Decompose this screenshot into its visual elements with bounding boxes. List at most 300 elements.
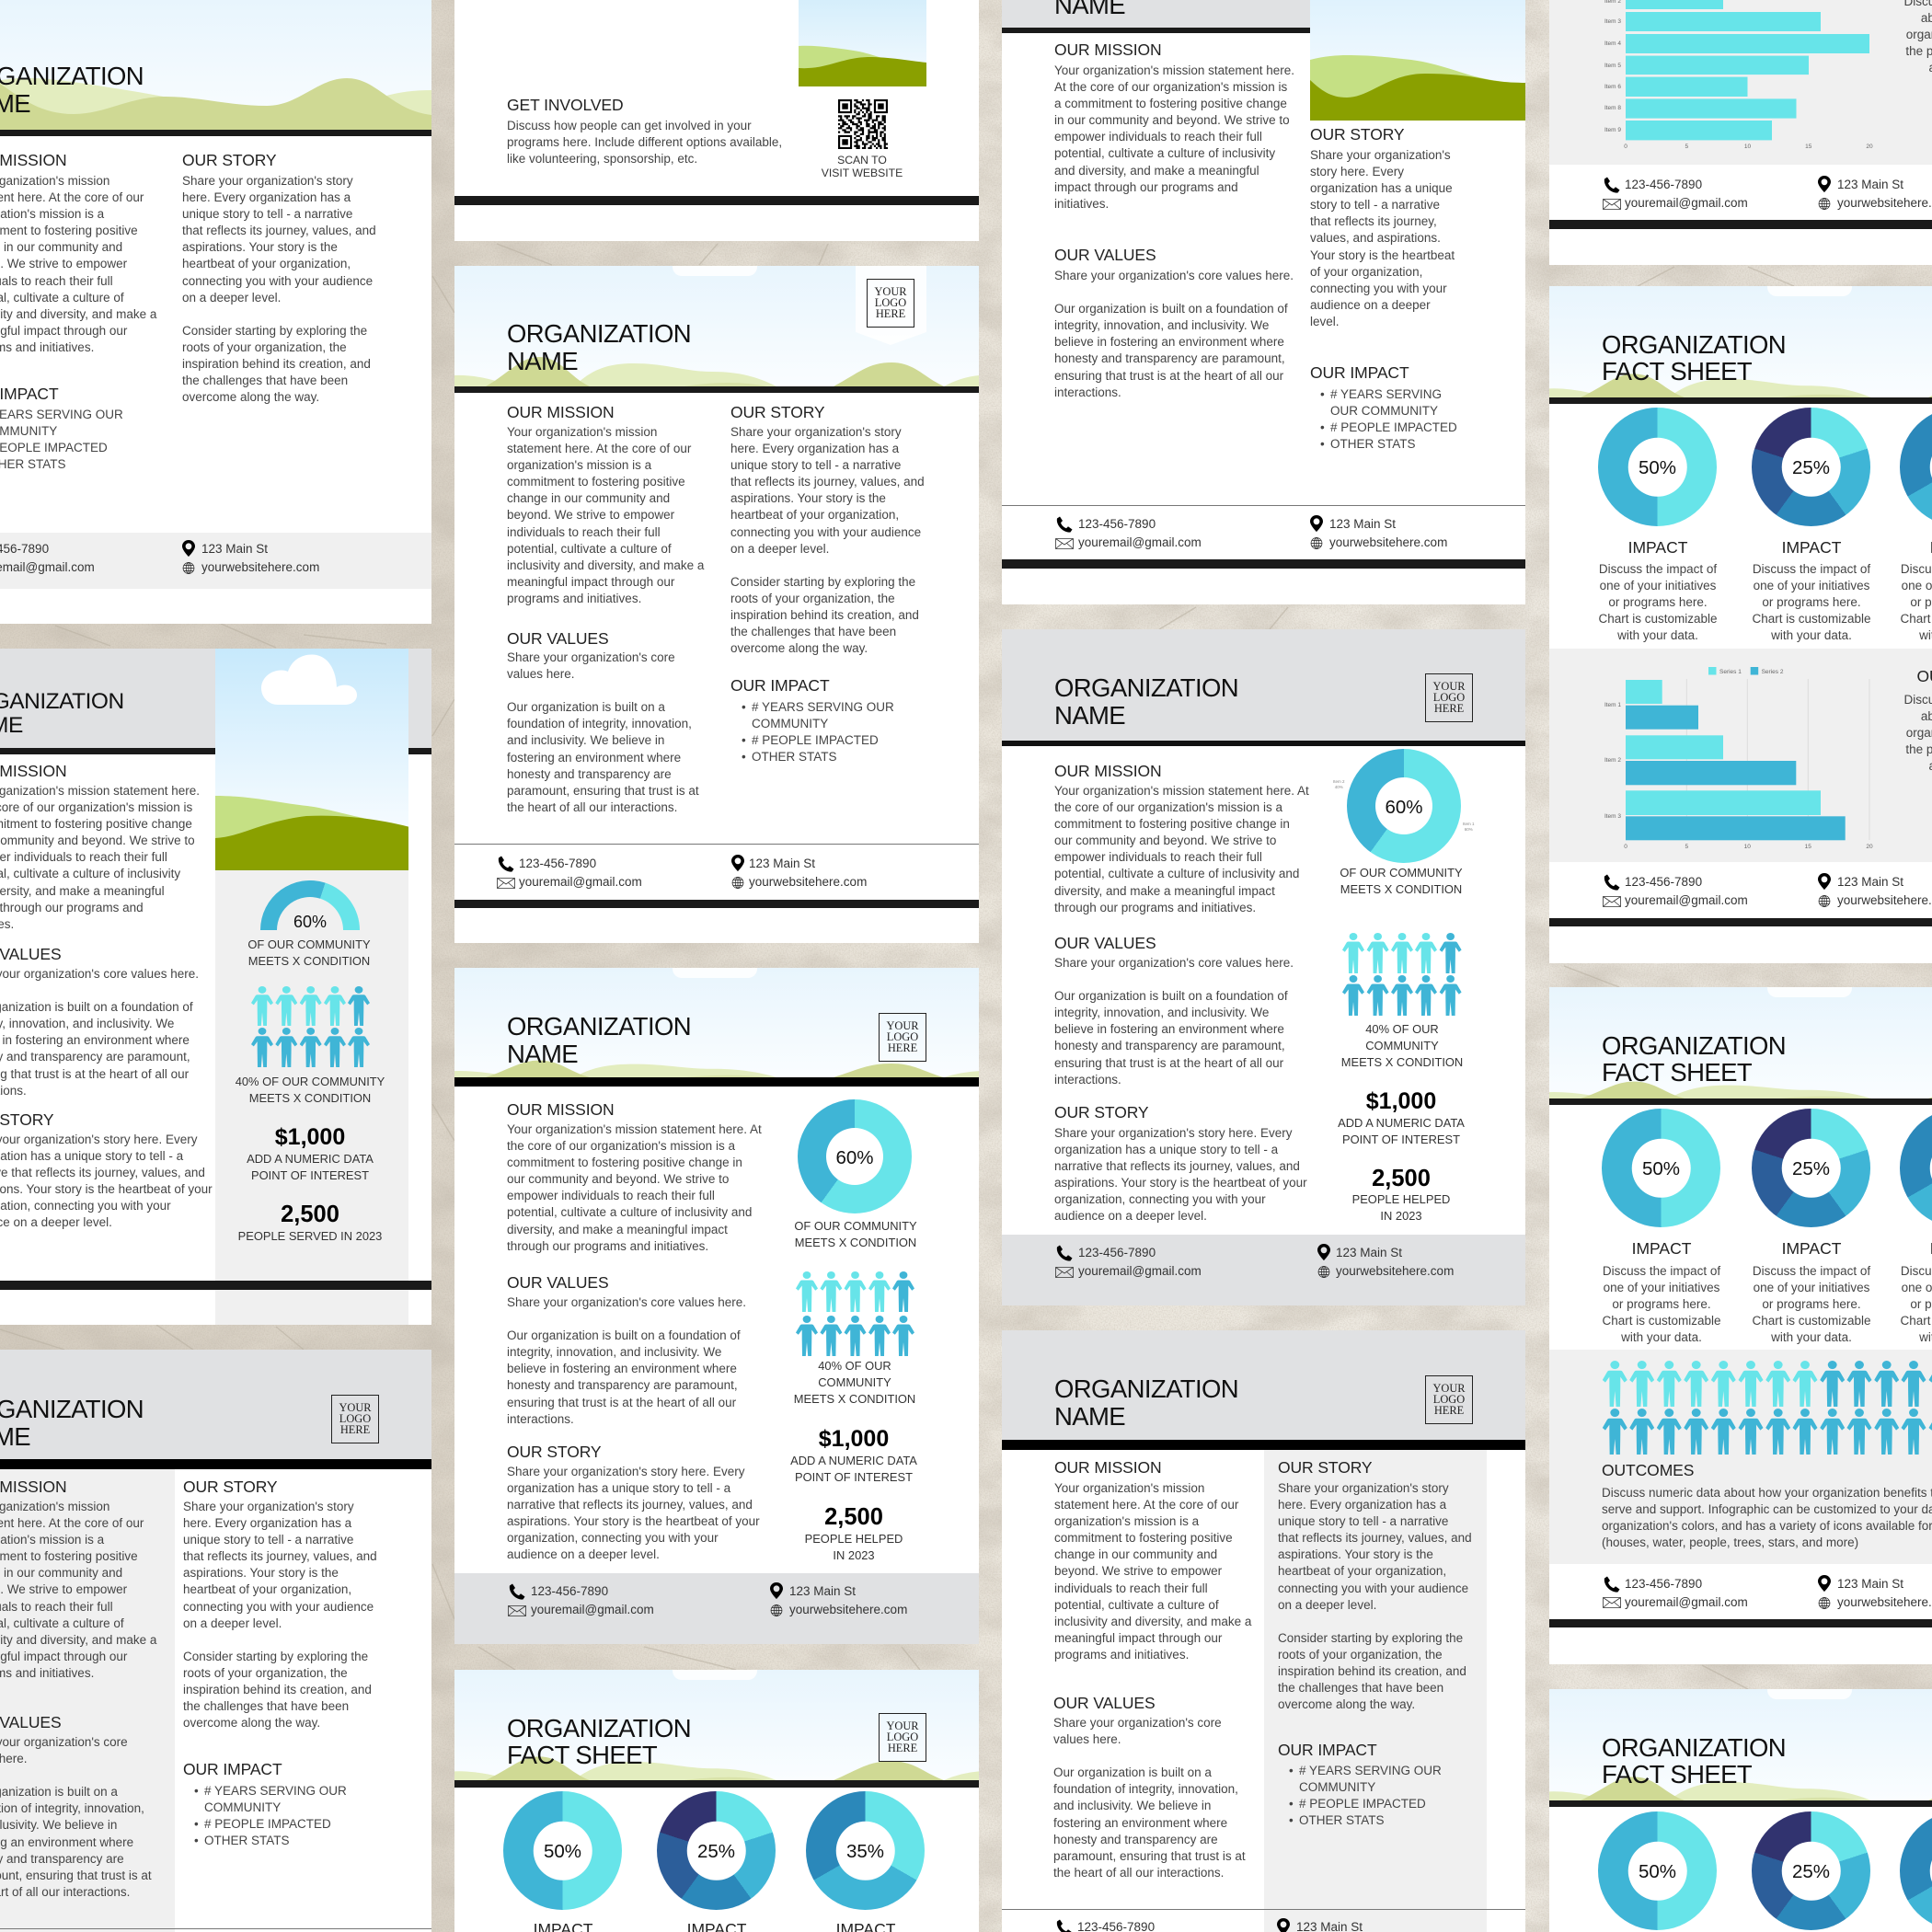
header rule: [1549, 1800, 1932, 1807]
mission text: potential, cultivate a culture of inclusivity and: [507, 1205, 752, 1219]
bar chart: [1549, 0, 1890, 161]
footer divider: [454, 844, 979, 845]
values text: the heart of all our interactions.: [507, 800, 677, 814]
values text: [1054, 268, 1294, 401]
story text: roots of your organization, the: [182, 340, 347, 354]
heading: our mission: OUR MISSION: [1054, 1458, 1162, 1477]
story text: [507, 1465, 760, 1561]
outcomes text: (houses, water, people, trees, stars, and more): [1602, 1535, 1858, 1549]
heading: our mission: OUR MISSION: [1054, 40, 1162, 59]
impact text: or programs here.: [1762, 595, 1861, 609]
values text: [0, 967, 199, 1098]
mission text: [507, 425, 705, 605]
donut chart: 60%: [798, 1099, 912, 1213]
mission text: diversity, and make a meaningful impact: [1054, 884, 1275, 898]
impact text: [1886, 1263, 1932, 1346]
pictogram caption: MEETS X CONDITION: [794, 1392, 915, 1406]
title: [0, 1396, 144, 1451]
mission text: commitment to fostering positive: [1054, 1531, 1233, 1545]
header rule: [1549, 1098, 1932, 1105]
mission text: the core of our organization's mission is a: [507, 1139, 735, 1153]
outcomes text: [1602, 1485, 1932, 1551]
footer rule: [1549, 220, 1932, 229]
panel: two column with grey left column: •: [194, 1784, 199, 1798]
values text: believe in fostering an environment where: [507, 1362, 737, 1375]
story text: here. Every organization has a: [730, 442, 899, 455]
donut chart: 35%: [1900, 408, 1932, 526]
story text: Consider starting by exploring the: [730, 575, 915, 589]
contact details: youremail@gmail.com: [1078, 1264, 1202, 1278]
title: [507, 319, 691, 375]
pictogram caption: COMMUNITY: [1365, 1039, 1439, 1052]
mission text: beyond. We strive to empower: [1054, 1564, 1222, 1578]
story text: the challenges that have been: [730, 625, 896, 638]
impact text: Chart is customizable: [1602, 1314, 1721, 1328]
heading: our story: OUR STORY: [183, 1478, 278, 1496]
header rule: [1002, 741, 1526, 746]
impact list: COMMUNITY: [752, 717, 828, 730]
values text: Our organization is built on a foundation of: [1054, 989, 1288, 1003]
story text: audience on a deeper level.: [507, 1547, 660, 1561]
header landscape: [454, 266, 979, 386]
story text: aspirations. Your story is the heartbeat of your: [507, 1514, 760, 1528]
QR caption: [821, 154, 903, 179]
heading: our mission: OUR MISSION: [507, 1100, 615, 1119]
pictogram caption: 40% OF OUR: [818, 1359, 891, 1373]
mission text: commitment to fostering positive change in: [507, 1156, 742, 1169]
story text: [183, 1499, 377, 1731]
bar chart: Item 3: [1604, 18, 1621, 25]
story text: aspirations. Your story is the: [730, 491, 886, 505]
impact list: # YEARS SERVING OUR: [752, 700, 894, 714]
values text: Our organization is built on a: [1053, 1765, 1212, 1779]
logo box: LOGO: [1433, 691, 1465, 704]
story text: [1278, 1480, 1472, 1713]
story text: roots of your organization, the: [183, 1666, 348, 1680]
story text: story to tell - a narrative: [1310, 198, 1440, 212]
logo box: YOUR: [874, 285, 907, 298]
heading: our story: OUR STORY: [1054, 1103, 1149, 1121]
impact text: one of your initiatives: [1604, 1281, 1719, 1294]
story text: Share your organization's story here. Every: [507, 1465, 744, 1478]
story text: heartbeat of your organization,: [730, 508, 899, 522]
story text: overcome along the way.: [1278, 1697, 1415, 1711]
heading: our story: OUR STORY: [1278, 1458, 1373, 1477]
story text: organization has a unique story to tell - a: [507, 1481, 730, 1495]
values text: foundation of integrity, innovation,: [1053, 1782, 1238, 1796]
mission text: potential, cultivate a culture of inclusivity: [1054, 146, 1275, 160]
grouped bar chart: 20: [1866, 844, 1873, 850]
logo box: HERE: [876, 307, 905, 320]
mission text: At the core of our organization's mission is: [1054, 80, 1287, 94]
story text: Share your organization's story: [1278, 1481, 1449, 1495]
gauge caption: [217, 937, 401, 970]
landscape image: [799, 0, 926, 86]
stat: $1,000: $1,000: [275, 1124, 345, 1150]
values text: Our organization is built on a: [507, 700, 665, 714]
logo box: YOUR: [886, 1019, 919, 1032]
story text: Share your organization's story: [183, 1500, 354, 1513]
impact text: with your data.: [1771, 628, 1852, 642]
footer divider: [1002, 1909, 1525, 1910]
header landscape: [0, 0, 431, 130]
gauge value: 60%: [293, 913, 327, 931]
story text: that reflects its journey,: [1310, 214, 1437, 228]
values text: values here.: [1053, 1732, 1121, 1746]
get involved text: like volunteering, sponsorship, etc.: [507, 152, 697, 166]
label: impact: IMPACT: [1632, 1239, 1691, 1258]
values text: paramount, ensuring that trust is at: [1053, 1849, 1246, 1863]
contact details: 123 Main St: [201, 542, 268, 556]
mission text: inclusivity and diversity, and make a: [1054, 1615, 1251, 1628]
heading: our values: OUR VALUES: [1054, 934, 1156, 952]
grouped bar chart: Item 2: [1604, 757, 1621, 764]
mission text: Your organization's mission: [1054, 1481, 1204, 1495]
header rule: [1002, 28, 1310, 33]
impact text: one of your initiatives: [1600, 579, 1716, 592]
label: impact: IMPACT: [1782, 538, 1841, 557]
mission text: commitment to fostering positive change in: [1054, 817, 1290, 831]
story text: aspirations. Your story is the: [182, 240, 338, 254]
story text: overcome along the way.: [730, 641, 868, 655]
impact text: one of your initiatives: [1754, 579, 1869, 592]
impact list: [742, 700, 894, 764]
pictogram: people: [1549, 1355, 1932, 1456]
stat: 2,500: 2,500: [281, 1202, 339, 1227]
logo box: LOGO: [887, 1731, 918, 1743]
story text: inspiration behind its creation, and: [182, 357, 371, 371]
panel: fact sheet with pictogram: [1549, 987, 1932, 1664]
mission text: the core of our organization's mission is a: [1054, 800, 1282, 814]
title: FACT SHEET: [507, 1741, 657, 1769]
mission text: [0, 174, 156, 354]
footer divider: [1002, 505, 1525, 506]
story text: unique story to tell - a narrative: [1278, 1514, 1448, 1528]
heading: our story: OUR STORY: [182, 151, 277, 169]
story text: that reflects its journey, values, and: [1278, 1531, 1472, 1545]
mission text: inclusivity and diversity, and make a: [507, 558, 704, 572]
impact list: OTHER STATS: [204, 1834, 290, 1847]
footer band: [454, 1573, 979, 1645]
stat caption: POINT OF INTEREST: [251, 1168, 369, 1182]
logo box: HERE: [1434, 1404, 1464, 1417]
logo box: LOGO: [887, 1030, 918, 1043]
landscape image: [1310, 0, 1525, 121]
impact list: # PEOPLE IMPACTED: [1299, 1797, 1426, 1811]
impact text: or programs here.: [1612, 1297, 1711, 1311]
heading: our values: OUR VALUES: [1054, 246, 1156, 264]
header rule: [0, 1459, 431, 1469]
contact details: youremail@gmail.com: [1625, 196, 1748, 210]
impact list: # PEOPLE IMPACTED: [752, 733, 879, 747]
mission text: statement here. At the core of our: [1054, 1498, 1238, 1512]
heading: our story: OUR STORY: [1310, 125, 1405, 144]
impact list: [204, 1783, 347, 1849]
contact details: yourwebsitehere.com: [201, 560, 319, 574]
grouped bar chart: 10: [1744, 844, 1751, 850]
title: ORGANIZATION: [1602, 330, 1786, 359]
stat: $1,000: $1,000: [1366, 1088, 1436, 1114]
title: [1054, 1375, 1238, 1431]
bar chart: 15: [1805, 144, 1812, 150]
panel: bottom centre sheet with grey right column: •: [1289, 1764, 1294, 1777]
logo box: LOGO: [875, 296, 906, 309]
footer rule: [1549, 1619, 1932, 1627]
footer rule: [454, 900, 979, 908]
logo box: [867, 279, 914, 328]
title: NAME: [507, 347, 578, 375]
panel: bottom centre sheet with grey right column: •: [1289, 1813, 1294, 1827]
title: [1054, 674, 1238, 730]
donut chart: 35%: [1900, 1811, 1932, 1930]
mission text: our community and beyond. We strive to: [507, 1172, 729, 1186]
grey column: [1264, 1450, 1487, 1932]
gauge caption: OF OUR COMMUNITY: [247, 937, 371, 951]
contact details: [1002, 1918, 1526, 1932]
pictogram caption: [218, 1074, 402, 1107]
chart label: [1463, 822, 1475, 833]
panel: two column with grey left column: •: [194, 1817, 199, 1831]
icon: QR code: [838, 99, 888, 149]
chart label: Item 1: [1463, 822, 1475, 826]
mission text: meaningful impact through our: [1054, 1631, 1222, 1645]
panel: centre sheet with donut stats: [1002, 629, 1525, 1305]
contact details: youremail@gmail.com: [1625, 893, 1748, 907]
header rule: [1549, 397, 1932, 404]
values text: Share your organization's core: [507, 650, 675, 664]
outcomes text: [1871, 0, 1932, 76]
panel: organization name with sidebar: [0, 649, 431, 1325]
stat: 2,500: 2,500: [1372, 1166, 1431, 1191]
pictogram caption: 40% OF OUR COMMUNITY: [236, 1075, 385, 1088]
story text: narrative that reflects its journey, values, and: [1054, 1159, 1300, 1173]
values text: values here.: [507, 667, 575, 681]
impact text: Chart is customizable: [1598, 612, 1718, 626]
donut chart: 50%: 50%: [1639, 457, 1676, 478]
impact text: one of your initiatives: [1754, 1281, 1869, 1294]
chart label: [1333, 779, 1345, 790]
logo box: HERE: [1434, 702, 1464, 715]
story text: organization has a unique story to tell - a: [1054, 1143, 1278, 1156]
story text: overcome along the way.: [182, 390, 319, 404]
contact details: [1549, 873, 1932, 910]
story text: of your organization,: [1310, 265, 1422, 279]
mission text: a commitment to fostering positive change: [1054, 97, 1287, 110]
values text: interactions.: [1054, 385, 1121, 399]
impact text: Discuss the impact of: [1603, 1264, 1720, 1278]
values text: honesty and transparency are: [507, 767, 672, 781]
title: ORGANIZATION: [1054, 1374, 1238, 1403]
story text: connecting you with your audience: [1278, 1581, 1468, 1595]
title: [1602, 331, 1786, 385]
donut chart: 50%: 50%: [1639, 1861, 1676, 1882]
story text: Consider starting by exploring the: [183, 1650, 368, 1663]
donut caption: MEETS X CONDITION: [1340, 882, 1462, 896]
panel: organization name with logo ribbon: •: [742, 733, 746, 747]
stat caption: ADD A NUMERIC DATA: [790, 1454, 917, 1467]
story text: here. Every organization has a: [1278, 1498, 1446, 1512]
impact list: # PEOPLE IMPACTED: [1330, 420, 1457, 434]
panel: bottom right fact sheet: [1549, 1689, 1932, 1932]
values text: ensuring that trust is at the heart of all our: [1054, 1056, 1283, 1070]
stat caption: IN 2023: [833, 1548, 875, 1562]
title: ORGANIZATION: [507, 1714, 691, 1742]
story text: organization, connecting you with your: [1054, 1192, 1266, 1206]
story text: aspirations. Your story is the: [183, 1566, 339, 1580]
mission text: potential, cultivate a culture of: [507, 542, 672, 556]
grey chart area: [1549, 0, 1932, 165]
values text: believe in fostering an environment where: [1054, 1022, 1284, 1036]
contact details: 123 Main St: [749, 857, 815, 870]
grouped bar chart: Item 1: [1604, 702, 1621, 708]
story text: on a deeper level.: [730, 542, 829, 556]
contact details: yourwebsitehere.com: [1329, 535, 1447, 549]
grouped bar chart: [1549, 649, 1890, 862]
heading: outcomes: OUTCOMES: [1602, 1461, 1694, 1479]
mission text: diversity, and make a meaningful impact: [507, 1223, 728, 1236]
stat caption: IN 2023: [1380, 1209, 1422, 1223]
impact text: Chart is customizable: [1752, 1314, 1871, 1328]
mission text: organization's mission is a: [1054, 1514, 1199, 1528]
sidebar landscape with cloud: [215, 649, 408, 870]
mission text: programs and initiatives.: [1054, 1648, 1189, 1662]
mission text: Your organization's mission statement here. At: [1054, 784, 1309, 798]
values text: paramount, ensuring that trust is at: [507, 784, 699, 798]
bar chart: 20: [1866, 144, 1873, 150]
bar chart: Item 4: [1604, 40, 1621, 47]
title: [0, 62, 144, 118]
impact text: [1738, 1263, 1885, 1346]
title: ORGANIZATION: [1602, 1733, 1786, 1762]
impact text: [1738, 561, 1885, 644]
panel: right column chart sheet fragment: [1549, 0, 1932, 265]
story text: overcome along the way.: [183, 1716, 320, 1730]
logo box: [1425, 673, 1473, 722]
contact details: 123-456-7890: [531, 1584, 608, 1598]
mission text: [1054, 63, 1294, 213]
panel: two column with grey left column: •: [194, 1834, 199, 1847]
story text: on a deeper level.: [183, 1616, 282, 1630]
impact text: with your data.: [1771, 1330, 1852, 1344]
pictogram: people: [1342, 933, 1462, 1018]
values text: [1054, 955, 1294, 1088]
donut chart: 25%: [1752, 1109, 1870, 1227]
bar chart: 0: [1624, 144, 1627, 150]
contact details: yourwebsitehere.com: [749, 875, 867, 889]
story text: that reflects its journey, values, and: [183, 1549, 377, 1563]
header band: [1002, 0, 1310, 28]
grouped bar chart: Item 3: [1604, 813, 1621, 820]
story text: organization, connecting you with your: [507, 1531, 719, 1545]
impact list: OTHER STATS: [1330, 437, 1416, 451]
header rule: [454, 386, 979, 393]
donut chart: 35%: [806, 1791, 925, 1910]
contact details: [0, 540, 319, 574]
mission text: potential, cultivate a culture of inclusivity and: [1054, 867, 1299, 880]
logo box: YOUR: [886, 1719, 919, 1732]
story text: Share your organization's story here. Every: [1054, 1126, 1292, 1140]
header landscape: [1549, 987, 1932, 1098]
heading: our story: OUR STORY: [730, 403, 825, 421]
stat caption: [1309, 1115, 1493, 1148]
label: impact: IMPACT: [1782, 1239, 1841, 1258]
values text: [507, 650, 699, 814]
values text: Share your organization's core: [1053, 1716, 1222, 1730]
heading: our story: OUR STORY: [507, 1443, 602, 1461]
logo box: HERE: [888, 1742, 917, 1754]
header landscape: [454, 968, 979, 1077]
values text: and inclusivity. We believe in: [507, 733, 664, 747]
contact details: 123 Main St: [1837, 178, 1903, 191]
stat caption: [805, 1532, 903, 1562]
grey chart area: [1549, 649, 1932, 862]
story text: the challenges that have been: [1278, 1681, 1443, 1695]
values text: integrity, innovation, and inclusivity. We: [1054, 1006, 1269, 1019]
header band: [0, 1350, 431, 1460]
values text: the heart of all our interactions.: [1053, 1866, 1224, 1880]
title: NAME: [1054, 701, 1125, 730]
story text: unique story to tell - a narrative: [183, 1533, 353, 1547]
header rule: [0, 748, 431, 754]
impact list: [1330, 386, 1457, 453]
values text: [0, 1734, 152, 1901]
header band: [1002, 1330, 1525, 1441]
contact details: youremail@gmail.com: [531, 1603, 654, 1616]
values text: interactions.: [1054, 1073, 1121, 1087]
stat caption: PEOPLE SERVED IN 2023: [238, 1229, 382, 1243]
pictogram: people: [251, 986, 371, 1071]
donut caption: OF OUR COMMUNITY: [1340, 866, 1463, 880]
impact list: [1299, 1763, 1442, 1829]
mission text: impact through our programs and: [1054, 180, 1238, 194]
values text: believe in fostering an environment where: [1054, 335, 1284, 349]
impact list: OTHER STATS: [752, 750, 837, 764]
donut caption: [794, 1219, 917, 1249]
impact list: OTHER STATS: [1299, 1813, 1385, 1827]
title: NAME: [507, 1040, 578, 1068]
values text: ensuring that trust is at the heart of all our: [507, 1396, 736, 1409]
stat caption: ADD A NUMERIC DATA: [1338, 1116, 1465, 1130]
stat caption: [1309, 1191, 1493, 1225]
mission text: statement here. At the core of our: [507, 442, 691, 455]
panel: organization name with logo ribbon: •: [742, 700, 746, 714]
heading: our values: OUR VALUES: [507, 629, 609, 648]
contact details: 123 Main St: [789, 1584, 856, 1598]
mission text: and diversity, and make a meaningful: [1054, 164, 1259, 178]
story text: here. Every organization has a: [183, 1516, 351, 1530]
story text: Share your organization's: [1310, 148, 1451, 162]
contact details: 123-456-7890: [1625, 1577, 1702, 1591]
logo ribbon: [856, 266, 926, 344]
donut chart: 50%: [503, 1791, 622, 1910]
mission text: [0, 1499, 156, 1682]
header landscape: [1549, 1689, 1932, 1800]
mission text: beyond. We strive to empower: [507, 508, 674, 522]
title: ORGANIZATION: [507, 1012, 691, 1041]
header rule: [1002, 1440, 1526, 1450]
mission text: change in our community and: [1054, 1547, 1217, 1561]
heading: our values: OUR VALUES: [507, 1273, 609, 1292]
story text: roots of your organization, the: [730, 592, 895, 605]
title: [507, 1714, 691, 1769]
panel: organization name with logo ribbon: •: [742, 750, 746, 764]
grey column: [0, 1469, 175, 1932]
mission text: Your organization's mission: [507, 425, 657, 439]
story text: story here. Every: [1310, 165, 1404, 178]
pictogram caption: MEETS X CONDITION: [249, 1091, 371, 1105]
contact details: youremail@gmail.com: [1078, 535, 1202, 549]
logo box: [879, 1013, 926, 1062]
